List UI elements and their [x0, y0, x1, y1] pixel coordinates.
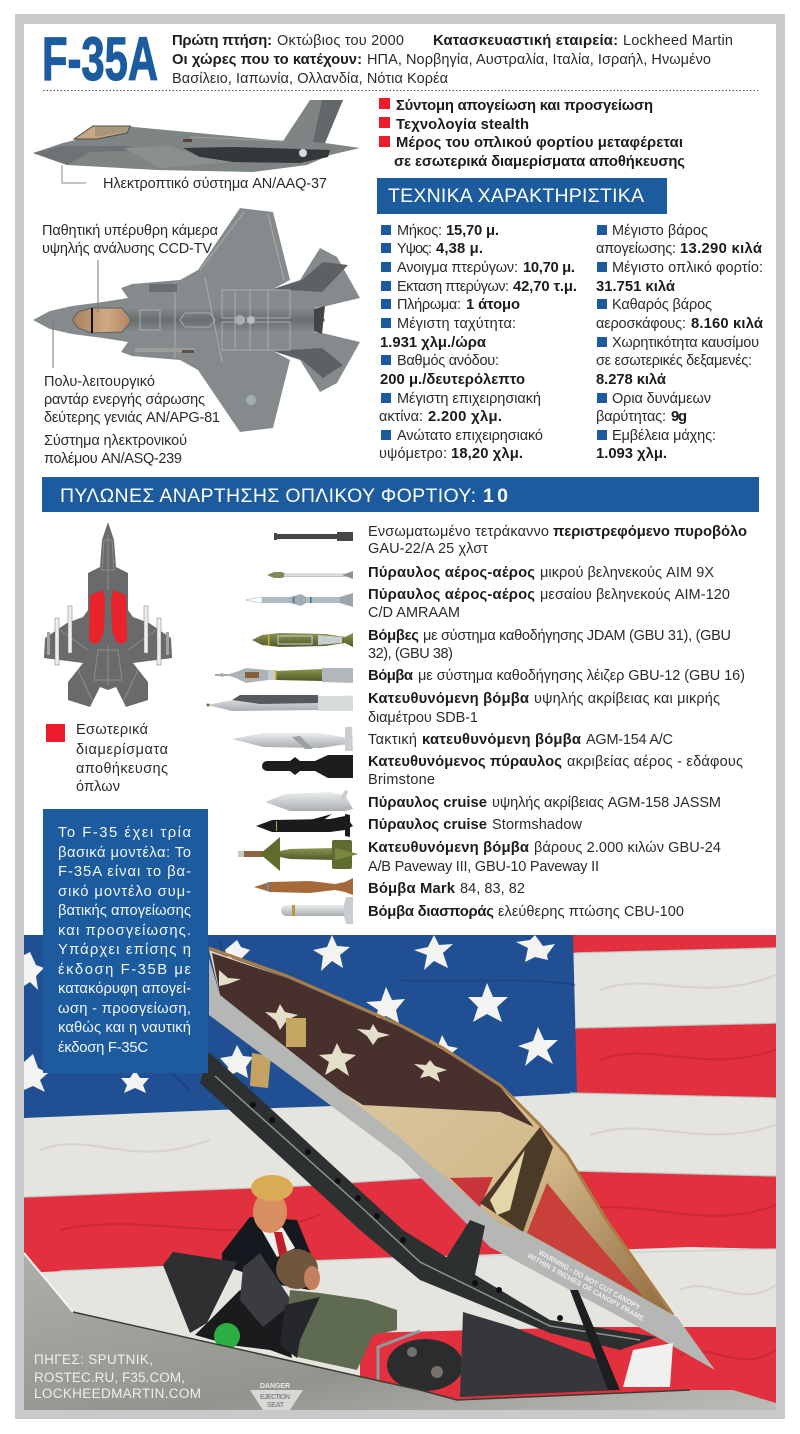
specifications: column 1: 10,70 μ. [523, 260, 575, 276]
key features list: Μέρος του οπλικού φορτίου μεταφέρεται [396, 135, 683, 151]
specifications: column 2: Καθαρός βάρος [612, 297, 712, 313]
callouts: camera and radar: Παθητική υπέρυθρη κάμερα [42, 223, 218, 239]
callouts: camera and radar: Πολυ-λειτουργικό [44, 374, 155, 390]
weapon descriptions: υψηλής ακρίβειας και μικρής [534, 691, 720, 707]
weapon descriptions: C/D AMRAAM [368, 605, 460, 621]
ejection seat warning sign [250, 1383, 303, 1410]
specifications: column 1: υψόμετρο: [379, 446, 447, 462]
fuselage [24, 1253, 776, 1410]
photo: F-35 cockpit in front of the US flag [24, 935, 776, 1410]
weapon descriptions: μεσαίου βεληνεκούς AIM-120 [540, 587, 730, 603]
canopy [72, 308, 130, 333]
heading: technical characteristics [377, 178, 667, 214]
callout: the three F-35 models: καθώς και η ναυτική [58, 1020, 191, 1036]
weapon: SDB-1 [206, 695, 353, 711]
weapon: AIM-9X [267, 571, 353, 579]
specifications: column 2: Ορια δυνάμεων [612, 391, 711, 407]
key features list: Τεχνολογία stealth [396, 117, 529, 133]
specifications: column 2 [596, 223, 763, 462]
callouts: camera and radar: υψηλής ανάλυσης CCD-TV [42, 241, 212, 257]
specifications: column 1: Πλήρωμα: [397, 297, 461, 313]
specifications: column 2: 8.278 κιλά [596, 372, 666, 388]
weapon: AIM-120 [245, 593, 353, 607]
key features list [379, 98, 685, 170]
header facts: Πρώτη πτήση: [172, 33, 272, 49]
weapon descriptions: Ενσωματωμένο τετράκαννο [368, 524, 549, 540]
specifications: column 2: Χωρητικότητα καυσίμου [612, 335, 759, 351]
title: F-35A: F-35A [42, 25, 158, 93]
weapon descriptions: με σύστημα καθοδήγησης λέιζερ GBU-12 (GBU 16) [418, 668, 745, 684]
callout: the three F-35 models: F-35A είναι το βα- [58, 864, 191, 880]
flag stars [24, 935, 558, 1093]
ejection seat [163, 1252, 293, 1358]
weapon descriptions: Πύραυλος cruise [368, 795, 487, 811]
ejection seat warning sign: EJECTION [260, 1394, 290, 1401]
specifications: column 2: Μέγιστο βάρος [612, 223, 708, 239]
callout: the three F-35 models: κατακόρυφη απογεί- [58, 981, 191, 997]
weapon: GBU-24 [238, 837, 358, 871]
heading: weapon pylons: ΠΥΛΩΝΕΣ ΑΝΑΡΤΗΣΗΣ ΟΠΛΙΚΟΥ ΦΟΡΤΙΟΥ: [60, 485, 476, 507]
weapon descriptions: Πύραυλος αέρος-αέρος [368, 565, 535, 581]
weapon descriptions: διαμέτρου SDB-1 [368, 710, 478, 726]
specifications: column 2: βαρύτητας: [596, 409, 666, 425]
legend: internal weapon bays: Εσωτερικά [76, 722, 148, 738]
callouts: camera and radar [42, 223, 220, 467]
weapon: JASSM [265, 790, 353, 811]
key features list: Σύντομη απογείωση και προσγείωση [396, 98, 653, 114]
canopy warning text: WITHIN 3 INCHES OF CANOPY FRAME [526, 1253, 645, 1323]
specifications: column 1: Υψος: [397, 241, 432, 257]
specifications: column 1 [379, 223, 577, 462]
specifications: column 2: 13.290 κιλά [680, 241, 762, 257]
weapon illustrations [206, 532, 358, 924]
callout: the three F-35 models: βασικά μοντέλα: Το [58, 845, 191, 861]
specifications: column 2: αεροσκάφους: [596, 316, 686, 332]
weapon descriptions: Βόμβα διασποράς [368, 904, 494, 920]
specifications: column 2: 9g [671, 409, 687, 425]
weapon descriptions: υψηλής ακρίβειας AGM-158 JASSM [492, 795, 721, 811]
weapon: JDAM bomb [252, 633, 353, 647]
heading: weapon pylons: 10 [483, 485, 508, 507]
legend: internal weapon bays: διαμερίσματα [76, 742, 168, 758]
callout: the three F-35 models: έκδοση F-35B με [58, 962, 191, 978]
weapon: GBU-12 laser bomb [215, 668, 353, 683]
weapon descriptions: με σύστημα καθοδήγησης JDAM (GBU 31), (GBU [423, 628, 731, 644]
sources [34, 1352, 201, 1401]
callouts: camera and radar: ραντάρ ενεργής σάρωσης [44, 392, 205, 408]
weapon descriptions: περιστρεφόμενο πυροβόλο [553, 524, 747, 540]
weapon descriptions: Βόμβα [368, 668, 413, 684]
canopy warning text: WARNING - DO NOT CUT CANOPY [537, 1250, 641, 1312]
weapon descriptions: 84, 83, 82 [460, 881, 525, 897]
legend: internal weapon bays [46, 722, 168, 795]
specifications: column 2: Εμβέλεια μάχης: [612, 428, 716, 444]
callouts: camera and radar: Σύστημα ηλεκτρονικού [44, 433, 187, 449]
specifications: column 1: 2.200 χλμ. [428, 409, 502, 425]
canopy glass [209, 950, 673, 1317]
header facts [172, 33, 733, 87]
internal weapon bays [89, 590, 127, 644]
weapon descriptions: Βόμβα Mark [368, 881, 456, 897]
header facts: ΗΠΑ, Νορβηγία, Αυστραλία, Ιταλία, Ισραήλ, Ηνωμένο [367, 52, 711, 68]
leader: electro-optical system [62, 165, 86, 183]
header facts: Οι χώρες που το κατέχουν: [172, 52, 362, 68]
specifications: column 1: 1 άτομο [466, 297, 520, 313]
heading: weapon pylons [42, 477, 759, 512]
header facts: Οκτώβιος του 2000 [277, 33, 404, 49]
header facts: Βασίλειο, Ιαπωνία, Ολλανδία, Νότια Κορέα [172, 71, 448, 87]
pilot helmet [387, 1339, 463, 1391]
specifications: column 2: 8.160 κιλά [691, 316, 763, 332]
weapon descriptions: Brimstone [368, 772, 435, 788]
callout: the three F-35 models [43, 809, 208, 1073]
specifications: column 1: 42,70 τ.μ. [513, 279, 577, 295]
sources: LOCKHEEDMARTIN.COM [34, 1386, 201, 1401]
specifications: column 1: Μέγιστη επιχειρησιακή [397, 391, 541, 407]
specifications: column 2: Μέγιστο οπλικό φορτίο: [612, 260, 763, 276]
cockpit handle [378, 1331, 420, 1382]
ejection seat warning sign: DANGER [260, 1383, 290, 1390]
pilot [276, 1249, 397, 1370]
key features list: σε εσωτερικά διαμερίσματα αποθήκευσης [394, 154, 685, 170]
weapon descriptions: ελεύθερης πτώσης CBU-100 [498, 904, 684, 920]
specifications: column 1: Βαθμός ανόδου: [397, 353, 499, 369]
callout: the three F-35 models: ωση - προσγείωση, [58, 1001, 191, 1017]
canopy frame [209, 958, 715, 1370]
callout: the three F-35 models: και προσγείωσης. [58, 923, 191, 939]
header facts: Lockheed Martin [623, 33, 733, 49]
underside view with weapon bays [44, 522, 172, 707]
legend: internal weapon bays: όπλων [76, 779, 120, 795]
weapon descriptions: Πύραυλος cruise [368, 817, 487, 833]
specifications: column 1: Ανοιγμα πτερύγων: [397, 260, 518, 276]
specifications: column 1: 15,70 μ. [446, 223, 499, 239]
legend: internal weapon bays: αποθήκευσης [76, 761, 168, 777]
specifications: column 1: Μέγιστη ταχύτητα: [397, 316, 516, 332]
ejection seat warning sign: SEAT [267, 1402, 285, 1409]
weapon descriptions: ακριβείας αέρος - εδάφους [567, 754, 743, 770]
callout: the three F-35 models: βατικής απογείωσης [58, 903, 191, 919]
callouts: camera and radar: δεύτερης γενιάς AN/APG-81 [44, 410, 220, 426]
weapon: Storm Shadow [256, 814, 353, 837]
weapon descriptions: A/B Paveway III, GBU-10 Paveway II [368, 859, 599, 875]
canopy rail [200, 1052, 657, 1350]
weapon descriptions: βάρους 2.000 κιλών GBU-24 [534, 840, 721, 856]
specifications: column 2: 31.751 κιλά [596, 279, 675, 295]
specifications: column 2: απογείωσης: [596, 241, 676, 257]
callout: the three F-35 models: σικό μοντέλο συμ- [58, 884, 191, 900]
sources: ΠΗΓΕΣ: SPUTNIK, [34, 1352, 153, 1367]
callouts: camera and radar: πολέμου AN/ASQ-239 [44, 451, 182, 467]
weapon descriptions: Τακτική [368, 732, 417, 748]
weapon descriptions [368, 524, 747, 920]
weapon descriptions: GAU-22/A 25 χλστ [368, 541, 488, 557]
weapon descriptions: κατευθυνόμενη βόμβα [422, 732, 581, 748]
sources: ROSTEC.RU, F35.COM, [34, 1370, 185, 1385]
weapon descriptions: Κατευθυνόμενη βόμβα [368, 840, 529, 856]
weapon descriptions: Βόμβες [368, 628, 419, 644]
side view of the F-35A [33, 100, 360, 183]
weapon descriptions: Πύραυλος αέρος-αέρος [368, 587, 535, 603]
heading: technical characteristics: ΤΕΧΝΙΚΑ ΧΑΡΑΚΤΗΡΙΣΤΙΚΑ [388, 185, 644, 207]
header facts: Κατασκευαστική εταιρεία: [433, 33, 618, 49]
specifications: column 1: 4,38 μ. [436, 241, 483, 257]
weapon: Brimstone [262, 755, 353, 778]
callout: the three F-35 models: Υπάρχει επίσης η [58, 942, 191, 958]
weapon descriptions: AGM-154 A/C [586, 732, 673, 748]
weapon descriptions: μικρού βεληνεκούς AIM 9X [540, 565, 714, 581]
presenter [222, 1175, 312, 1290]
weapon: Mark bomb [254, 878, 353, 895]
top view of the F-35A [33, 208, 360, 432]
specifications: column 1: Ανώτατο επιχειρησιακό [397, 428, 543, 444]
specifications: column 1: 200 μ./δευτερόλεπτο [380, 372, 525, 388]
specifications: column 1: Εκταση πτερύγων: [397, 279, 509, 295]
weapon: GAU-22/A gun [274, 532, 353, 541]
weapon descriptions: Κατευθυνόμενος πύραυλος [368, 754, 562, 770]
weapon: AGM-154 [232, 727, 353, 751]
cockpit equipment [460, 1290, 673, 1397]
weapon: CBU-100 [281, 897, 353, 924]
weapon descriptions: Stormshadow [492, 817, 583, 833]
weapon descriptions: Κατευθυνόμενη βόμβα [368, 691, 529, 707]
specifications: column 1: ακτίνα: [379, 409, 423, 425]
callout: the three F-35 models: Το F-35 έχει τρία [58, 825, 191, 841]
flag stripes [24, 935, 776, 1410]
specifications: column 1: 18,20 χλμ. [451, 446, 523, 462]
callout: the three F-35 models: έκδοση F-35C [58, 1040, 148, 1056]
specifications: column 2: 1.093 χλμ. [596, 446, 667, 462]
weapon descriptions: 32), (GBU 38) [368, 646, 453, 662]
label: electro-optical system: Ηλεκτροπτικό σύστημα AN/AAQ-37 [103, 176, 327, 192]
flag canton [24, 935, 577, 1118]
specifications: column 2: σε εσωτερικές δεξαμενές: [596, 353, 752, 369]
specifications: column 1: 1.931 χλμ./ώρα [380, 335, 486, 351]
specifications: column 1: Μήκος: [397, 223, 442, 239]
